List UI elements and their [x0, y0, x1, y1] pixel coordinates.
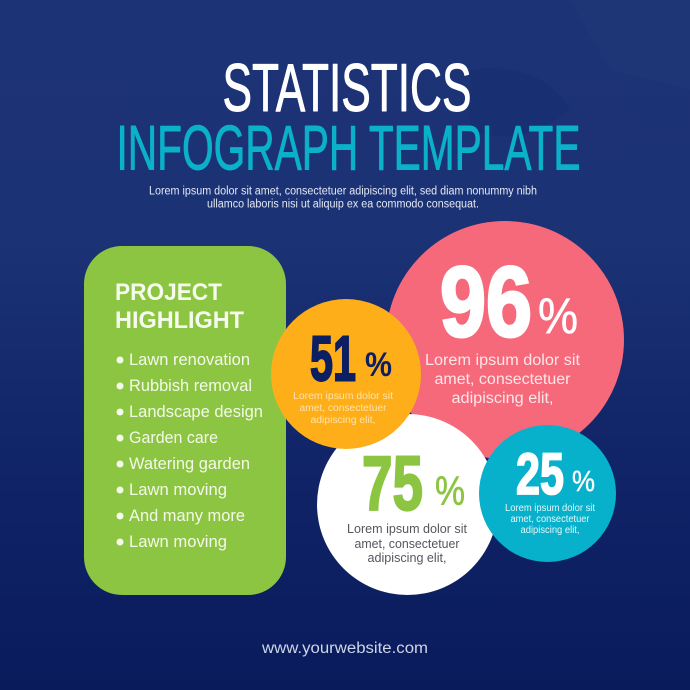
- stat circle: 75%: adipiscing elit,: [368, 551, 446, 565]
- footer website: www.yourwebsite.com: [261, 640, 428, 657]
- stat circle: 51%: 51: [310, 322, 356, 394]
- panel: project highlight: [84, 246, 286, 595]
- stat circle: 96%: [386, 221, 624, 459]
- stat circle: 75%: Lorem ipsum dolor sit: [347, 522, 468, 536]
- stat circle: 51%: adipiscing elit,: [310, 415, 376, 426]
- panel heading: HIGHLIGHT: [115, 307, 244, 334]
- subtitle: Lorem ipsum dolor sit amet, consectetuer adipiscing elit, sed diam nonummy nibh: [149, 186, 537, 198]
- stat circle: 75%: %: [435, 468, 465, 514]
- bullet list: Rubbish removal: [129, 377, 252, 395]
- bullet list: Landscape design: [129, 403, 263, 421]
- stat circle: 75%: amet, consectetuer: [354, 537, 460, 551]
- bullet list: [116, 351, 263, 551]
- stat circle: 51%: %: [365, 346, 392, 384]
- stat circle: 75%: 75: [362, 441, 423, 527]
- stat circle: 25%: [479, 425, 616, 562]
- subtitle: ullamco laboris nisi ut aliquip ex ea commodo consequat.: [207, 198, 479, 210]
- subtitle: [149, 186, 537, 210]
- stat circle: 25%: %: [572, 466, 595, 498]
- bullet list: Watering garden: [129, 455, 250, 473]
- stat circle: 96%: Lorem ipsum dolor sit: [425, 352, 581, 369]
- stat circle: 96%: 96: [440, 246, 532, 357]
- bullet list: Lawn moving: [129, 481, 227, 499]
- panel heading: PROJECT: [115, 279, 222, 306]
- stat circle: 75%: [317, 414, 498, 595]
- bullet list: Lawn moving: [129, 533, 227, 551]
- stat circle: 51%: amet, consectetuer: [300, 403, 387, 414]
- bullet list: Garden care: [129, 429, 218, 447]
- stat circle: 25%: 25: [516, 442, 564, 507]
- title: [116, 50, 580, 184]
- stat circle: 25%: amet, consectetuer: [510, 514, 590, 525]
- panel heading: [115, 279, 244, 334]
- stat circle: 96%: adipiscing elit,: [452, 390, 554, 407]
- stat circle: 96%: %: [538, 288, 578, 344]
- bullet list: Lawn renovation: [129, 351, 250, 369]
- stat circle: 51%: [271, 299, 421, 449]
- stat circle: 25%: adipiscing elit,: [520, 525, 580, 536]
- title: STATISTICS: [222, 50, 472, 126]
- stat circle: 51%: Lorem ipsum dolor sit: [293, 391, 393, 402]
- stat circle: 25%: Lorem ipsum dolor sit: [505, 503, 595, 514]
- bullet list: And many more: [129, 507, 245, 525]
- stat circle: 96%: amet, consectetuer: [434, 371, 570, 388]
